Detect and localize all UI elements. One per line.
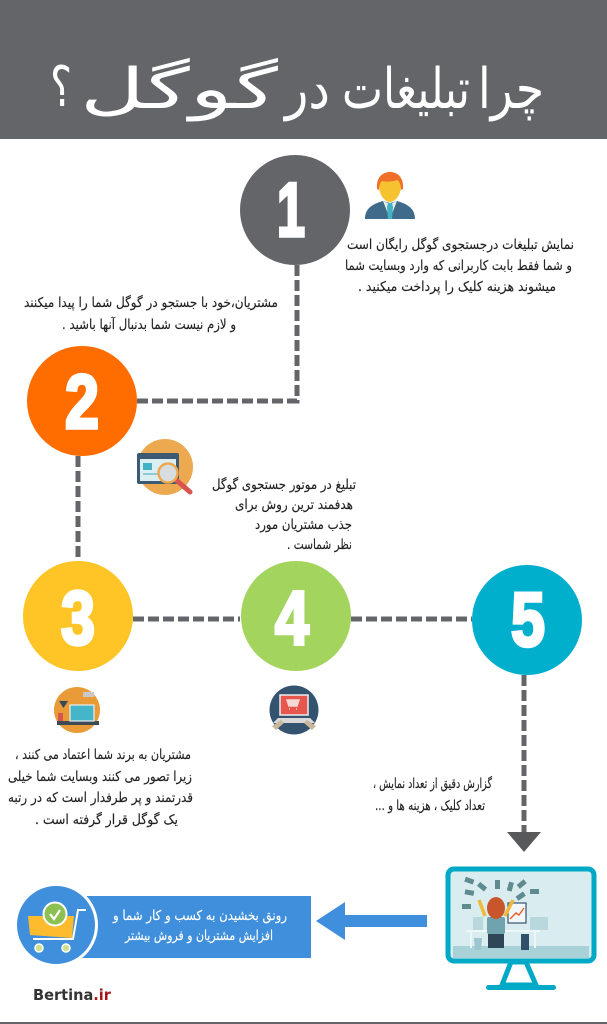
text: step 2: [24, 294, 278, 333]
text: step 3: قدرتمند و پر طرفدار است که در رتبه: [8, 790, 193, 806]
text: step 1: نمایش تبلیغات درجستجوی گوگل رایگان است: [347, 236, 574, 253]
icon: online shop laptop: [270, 686, 318, 734]
step 5 circle: 5: [511, 578, 545, 663]
text: step 3: [8, 747, 193, 828]
connector: 2 to 3: [76, 456, 80, 561]
step 4 circle: [241, 561, 351, 671]
callout: result banner: [82, 896, 311, 958]
text: step 2: مشتریان،خود با جستجو در گوگل شما را پیدا میکنند: [24, 294, 278, 311]
icon: shopping cart with check: [16, 884, 96, 966]
text: step 3: مشتریان به برند شما اعتماد می کنند ،: [15, 747, 191, 763]
text: search engine: [212, 476, 356, 553]
step 2 circle: [27, 346, 137, 456]
icon: laptop on desk: [54, 687, 100, 733]
text: step 1: [345, 236, 574, 295]
arrow: monitor to banner: [316, 902, 427, 940]
text: step 1: و شما فقط بابت کاربرانی که وارد وبسایت شما: [345, 258, 572, 274]
text: result: افزایش مشتریان و فروش بیشتر: [124, 928, 273, 944]
step 3 circle: 3: [61, 576, 95, 661]
text: result: [112, 908, 287, 944]
text: step 5: گزارش دقیق از تعداد نمایش ،: [373, 775, 492, 792]
step 1 circle: 1: [277, 168, 305, 253]
title banner: [0, 0, 607, 139]
icon: search window: [137, 439, 193, 495]
title: گوگل: [80, 57, 279, 122]
connector: 3 to 4: [133, 616, 240, 622]
text: step 3: یک گوگل قرار گرفته است .: [35, 811, 178, 828]
icon: businessman: [365, 172, 415, 219]
step 3 circle: [23, 561, 133, 671]
text: step 5: [373, 775, 492, 814]
text: search engine: نظر شماست .: [287, 537, 352, 553]
text: step 5: تعداد کلیک ، هزینه ها و ...: [375, 798, 485, 814]
step 2 circle: 2: [65, 360, 99, 445]
step 4 circle: 4: [275, 576, 309, 661]
logo: Bertina.ir: Bertina.ir: [33, 986, 111, 1004]
step 5 circle: [472, 565, 582, 675]
title: ؟: [50, 55, 72, 120]
text: step 2: و لازم نیست شما بدنبال آنها باشید .: [62, 316, 236, 333]
text: step 1: میشوند هزینه کلیک را پرداخت میکنید .: [358, 279, 556, 295]
text: search engine: تبلیغ در موتور جستجوی گوگل: [212, 476, 356, 493]
text: search engine: جذب مشتریان مورد: [255, 517, 352, 533]
step 1 circle: [240, 155, 350, 265]
title: [50, 55, 544, 122]
arrow: 5 to monitor: [507, 675, 541, 852]
title: تبلیغات: [342, 57, 470, 122]
title: چرا: [478, 57, 544, 122]
text: step 3: زیرا تصور می کنند وبسایت شما خیلی: [8, 769, 192, 785]
connector: 1 to 2: [137, 265, 297, 401]
title: در: [282, 57, 330, 122]
icon: monitor with happy person: [448, 869, 594, 990]
connector: 4 to 5: [351, 616, 472, 622]
text: result: رونق بخشیدن به کسب و کار شما و: [112, 908, 287, 924]
text: search engine: هدفمند ترین روش برای: [235, 497, 353, 513]
